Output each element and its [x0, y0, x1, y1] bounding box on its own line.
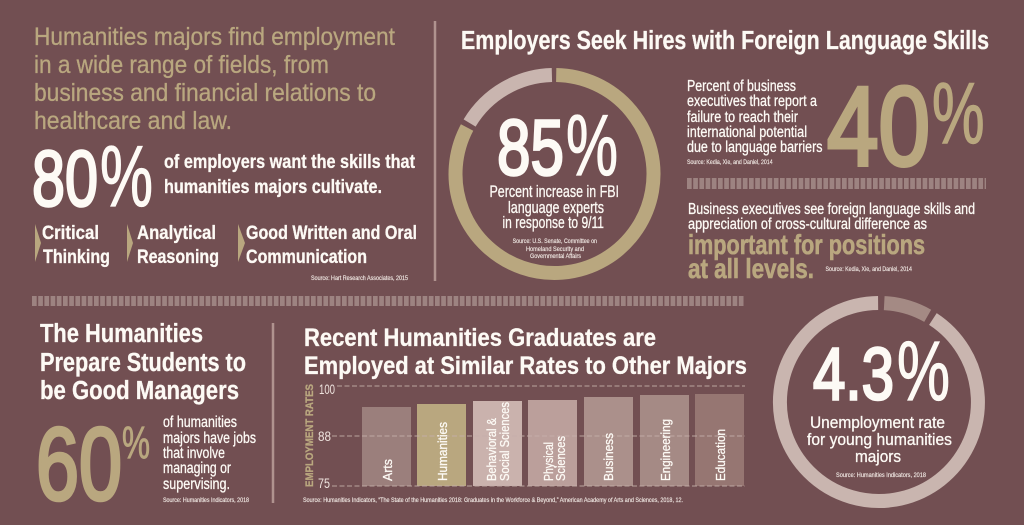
text: unemployment rate [807, 413, 952, 466]
stat: 85 percent [497, 98, 618, 194]
heading: recent humanities graduates [304, 324, 747, 380]
heading: humanities prepare students: Prepare Students to [40, 349, 246, 377]
source: Humanities Indicators: Source: Humanities Indicators, 2018 [163, 497, 249, 504]
text: FBI language experts [490, 183, 619, 232]
text: unemployment rate: for young humanities [807, 430, 952, 449]
text: FBI language experts: in response to 9/11 [502, 214, 604, 232]
skill: analytical reasoning: Analytical [137, 222, 216, 244]
text: managing or supervising: managing or [163, 460, 232, 477]
bar labels: Behavioral & [484, 418, 499, 481]
heading: humanities prepare students: The Humanities [40, 320, 203, 348]
source: Kedia, Xie, and Daniel: Source: Kedia, Xie, and Daniel, 2014 [826, 266, 912, 273]
skill: analytical reasoning [127, 222, 219, 268]
source: U.S. Senate: Source: U.S. Senate, Committee on [513, 238, 597, 245]
skill: good written and oral communication [238, 222, 417, 268]
source: State of the Humanities: Source: Humanities Indicators, “The State of the Humanities 2018: Graduates in the Workforce & Beyond,” American Academy of Arts and Sciences, 2018, 12. [303, 497, 683, 504]
skill: critical thinking [35, 222, 110, 268]
y-axis values [318, 381, 335, 491]
y-axis values: 100 [319, 381, 335, 397]
text: unemployment rate: Unemployment rate [810, 413, 945, 432]
ring chart: 4.3 percent [780, 303, 978, 501]
heading: recent humanities graduates: Employed at Similar Rates to Other Majors [304, 352, 747, 380]
text: managing or supervising: of humanities [163, 414, 237, 431]
bars [362, 394, 744, 486]
source: Hart Research: Source: Hart Research Associates, 2015 [311, 275, 408, 282]
panel: 85 percent ring [456, 75, 654, 273]
stat: 40 percent: 40 [827, 64, 930, 189]
heading: humanities prepare students [40, 320, 246, 405]
source: U.S. Senate: Homeland Security and [526, 246, 584, 253]
text: foreign language skills: appreciation of cross-cultural difference as [688, 216, 927, 233]
bar labels: Physical [541, 442, 556, 481]
text: business executives report failure: Percent of business [687, 78, 796, 95]
heading: humanities majors find employment: healthcare and law. [34, 107, 232, 135]
panel: 40 percent language barriers [687, 64, 984, 189]
y-axis title: EMPLOYMENT RATES [304, 384, 316, 487]
source: Humanities Indicators: Source: Humanities Indicators, 2018 [836, 472, 926, 479]
bar labels: Engineering [658, 419, 673, 481]
source: U.S. Senate: Governmental Affairs [530, 253, 582, 260]
panel: good managers [36, 320, 256, 522]
text: unemployment rate: majors [855, 447, 901, 466]
bar labels: Humanities [435, 422, 450, 481]
callout: important for positions at all levels [688, 229, 925, 284]
text: managing or supervising [163, 414, 256, 493]
bar labels: Social Sciences [497, 402, 512, 481]
stat: 80 percent [32, 129, 153, 225]
stat: 4.3 percent [813, 324, 950, 418]
text: business executives report failure: international potential [687, 124, 807, 141]
skill: critical thinking: Critical [42, 222, 99, 244]
text: business executives report failure: executives that report a [687, 93, 817, 110]
stat: 85 percent: % [566, 98, 618, 194]
bar chart: employment rates [304, 381, 745, 491]
panel: employment fields and 80 percent [32, 23, 417, 282]
stat: 80 percent: % [100, 129, 153, 225]
bar labels: Education [713, 429, 728, 481]
bar labels [380, 402, 728, 481]
heading: humanities majors find employment: in a wide range of fields, from [34, 51, 329, 79]
text: employers want the skills: humanities majors cultivate. [164, 176, 382, 198]
stat: 60 percent: 60 [36, 406, 122, 522]
text: FBI language experts: language experts [508, 199, 604, 217]
bar labels: Sciences [553, 436, 568, 481]
text: business executives report failure: failure to reach their [687, 109, 798, 126]
bar labels: Business [601, 433, 616, 481]
text: foreign language skills [688, 201, 975, 233]
ring chart: 85 percent [456, 75, 654, 273]
y-axis values: 75 [318, 475, 330, 491]
skill: good written and oral communication: Good Written and Oral [246, 222, 417, 244]
callout: important for positions at all levels: important for positions [688, 229, 925, 260]
heading: humanities majors find employment: Humanities majors find employment [34, 23, 395, 51]
skill: analytical reasoning: Reasoning [137, 246, 219, 268]
heading: recent humanities graduates: Recent Humanities Graduates are [304, 324, 656, 352]
callout: important for positions at all levels: at all levels. [688, 253, 814, 284]
stat: 40 percent: % [932, 66, 984, 162]
text: business executives report failure [687, 78, 823, 156]
text: business executives report failure: due to language barriers [687, 139, 823, 156]
source: U.S. Senate [513, 238, 597, 260]
stat: 60 percent: % [122, 417, 150, 468]
stat: 80 percent: 80 [32, 134, 98, 222]
skill: critical thinking: Thinking [43, 246, 110, 268]
text: employers want the skills: of employers want the skills that [164, 151, 415, 173]
panel: 4.3 percent ring [780, 303, 978, 501]
stat: 4.3 percent: % [897, 324, 950, 418]
text: managing or supervising: that involve [163, 445, 225, 462]
text: managing or supervising: majors have jobs [163, 430, 256, 447]
text: FBI language experts: Percent increase in FBI [490, 183, 619, 201]
bar labels: Arts [380, 459, 395, 481]
heading: humanities majors find employment: business and financial relations to [34, 79, 376, 107]
panel: important for positions at all levels [688, 201, 975, 284]
source: Kedia, Xie, and Daniel: Source: Kedia, Xie, and Daniel, 2014 [687, 159, 773, 166]
skill: good written and oral communication: Communication [246, 246, 367, 268]
heading: humanities prepare students: be Good Managers [40, 377, 239, 405]
y-axis values: 88 [318, 428, 331, 444]
text: managing or supervising: supervising. [163, 476, 230, 493]
stat: 85 percent: 85 [497, 102, 564, 192]
heading: humanities majors find employment [34, 23, 395, 135]
stat: 4.3 percent: 4.3 [813, 332, 894, 416]
panel: employment rates by major [303, 324, 747, 504]
text: employers want the skills [164, 151, 415, 198]
